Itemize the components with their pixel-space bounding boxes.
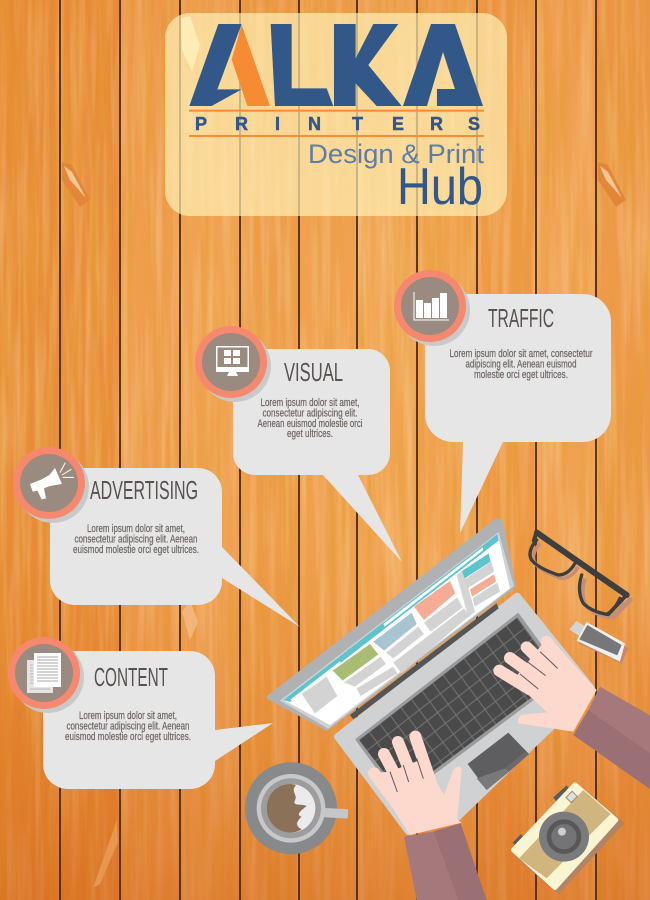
body text: content bbox=[65, 710, 191, 743]
right sleeve bbox=[573, 687, 650, 792]
speech bubble: content bbox=[8, 637, 273, 789]
icon: bar chart bbox=[394, 270, 470, 346]
heading: visual: VISUAL bbox=[284, 357, 343, 387]
heading: advertising: ADVERTISING bbox=[90, 475, 198, 505]
body text: advertising bbox=[73, 523, 199, 556]
left sleeve bbox=[404, 823, 487, 900]
body text: advertising: euismod molestie orci eget ultrices. bbox=[73, 544, 199, 556]
body text: visual: Aenean euismod molestie orci bbox=[258, 418, 362, 430]
illustration: desk items bbox=[245, 520, 632, 854]
body text: content: euismod molestie orci eget ultrices. bbox=[65, 731, 191, 743]
right hand bbox=[499, 636, 597, 732]
body text: visual: eget ultrices. bbox=[287, 428, 333, 440]
coffee cup bbox=[245, 762, 348, 854]
heading: traffic: TRAFFIC bbox=[488, 303, 554, 333]
heading: content: CONTENT bbox=[94, 662, 168, 692]
body text: advertising: Lorem ipsum dolor sit amet, bbox=[87, 523, 185, 535]
laptop base and keyboard bbox=[337, 596, 592, 832]
tagline: Hub: Hub bbox=[397, 158, 483, 216]
body text: traffic bbox=[450, 348, 593, 381]
left hand bbox=[370, 737, 462, 835]
body text: visual: consectetur adipiscing elit. bbox=[262, 408, 358, 420]
body text: content: Lorem ipsum dolor sit amet, bbox=[79, 710, 177, 722]
speech bubble: traffic bbox=[394, 270, 611, 533]
speech bubble: visual bbox=[195, 326, 402, 562]
logo mark: ALKA bbox=[189, 24, 484, 137]
body text: traffic: Lorem ipsum dolor sit amet, consectetur bbox=[450, 348, 593, 360]
logo panel bbox=[165, 13, 507, 216]
trackpad bbox=[468, 733, 529, 790]
icon: documents bbox=[8, 637, 84, 713]
body text: visual bbox=[258, 397, 362, 440]
speech bubble: advertising bbox=[13, 447, 300, 627]
illustration: hands and camera bbox=[370, 636, 650, 900]
tagline: Design & Print: Design & Print bbox=[308, 139, 485, 169]
icon: monitor bbox=[195, 326, 271, 402]
icon: megaphone bbox=[13, 447, 89, 523]
body text: traffic: molestie orci eget ultrices. bbox=[474, 369, 568, 381]
laptop screen bbox=[269, 520, 514, 729]
body text: traffic: adipiscing elit. Aenean euismod bbox=[466, 358, 576, 370]
body text: content: consectetur adipiscing elit. Aenean bbox=[66, 720, 190, 732]
body text: advertising: consectetur adipiscing elit. Aenean bbox=[74, 534, 198, 546]
usb drive bbox=[569, 621, 628, 663]
logo word: PRINTERS: PRINTERS bbox=[195, 114, 480, 134]
glasses bbox=[530, 532, 632, 618]
body text: visual: Lorem ipsum dolor sit amet, bbox=[260, 397, 360, 409]
camera bbox=[513, 785, 622, 892]
